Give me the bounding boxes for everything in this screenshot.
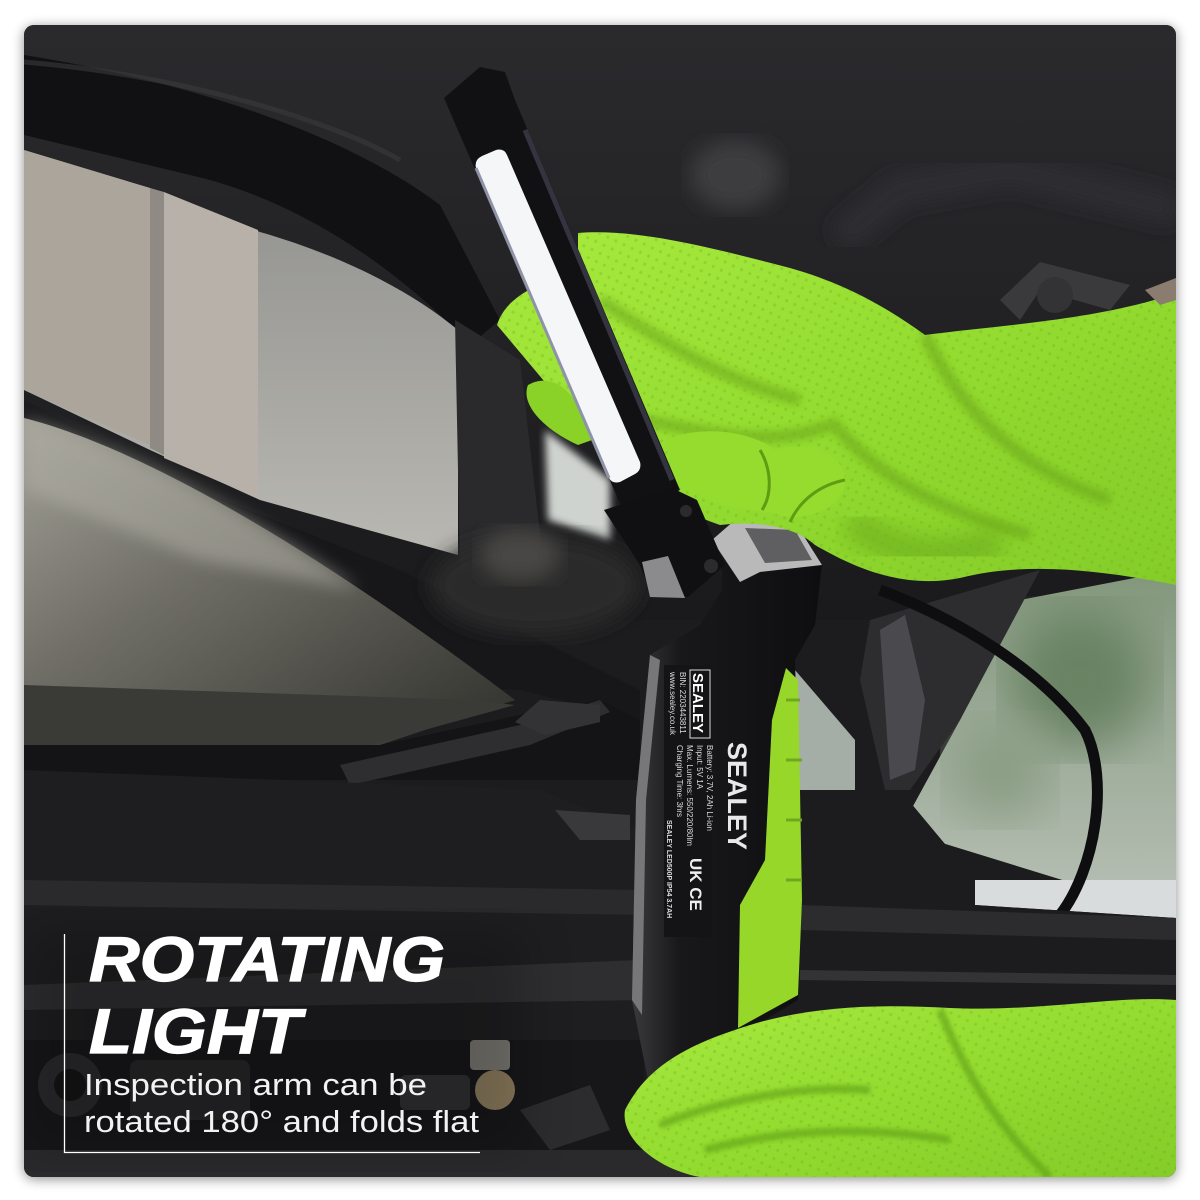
lower glove xyxy=(620,999,1176,1177)
lower right body behind light xyxy=(800,790,1176,918)
rating label: UK CE xyxy=(686,858,705,911)
brand name: SEALEY xyxy=(722,742,752,850)
background wall through side window xyxy=(24,150,458,555)
rating label: Charging Time: 3hrs xyxy=(675,745,684,817)
pillar behind the window xyxy=(455,320,539,548)
rating label: SEALEY LED500P IP54 3.7AH xyxy=(665,820,672,918)
work light and gloves xyxy=(444,67,1176,1177)
blurred shapes upper right xyxy=(690,140,780,210)
engine parts xyxy=(24,1040,724,1177)
rating label: SEALEY xyxy=(689,673,706,733)
bright gap by the hand xyxy=(545,430,610,540)
rating label xyxy=(664,665,714,937)
strut and hose xyxy=(860,570,1040,790)
upper dark door frame xyxy=(24,25,1176,268)
rating label: BIN: 2203443811 xyxy=(678,672,687,734)
wiper and scuttle xyxy=(386,714,523,744)
lower fingers of upper glove xyxy=(526,381,592,445)
caption body xyxy=(84,1067,479,1139)
caption frame lines xyxy=(64,934,480,1152)
inspection arm xyxy=(444,67,680,515)
green grip strip xyxy=(738,668,802,1028)
handle body xyxy=(632,520,822,1090)
caption title: LIGHT xyxy=(89,997,306,1067)
rating label: Input: 5V 1A xyxy=(695,745,704,790)
rating label: Battery: 3.7V, 2Ah Li-ion xyxy=(705,745,714,831)
caption title xyxy=(89,925,445,1067)
rating label: Max. Lumens: 550/220/80lm xyxy=(685,745,694,846)
upper glove xyxy=(497,232,1176,593)
rating label: www.sealey.co.uk xyxy=(668,671,677,736)
hinge bracket xyxy=(604,488,725,598)
dark engine clutter behind xyxy=(430,535,640,635)
caption body: Inspection arm can be xyxy=(84,1067,427,1102)
hood dark surfaces xyxy=(24,770,358,785)
caption title: ROTATING xyxy=(89,925,445,995)
blurred foliage background lower right xyxy=(913,578,1176,880)
caption body: rotated 180° and folds flat xyxy=(84,1104,479,1139)
silver edge xyxy=(632,655,660,1015)
caption shade xyxy=(47,966,515,1116)
windscreen glass xyxy=(24,414,515,745)
